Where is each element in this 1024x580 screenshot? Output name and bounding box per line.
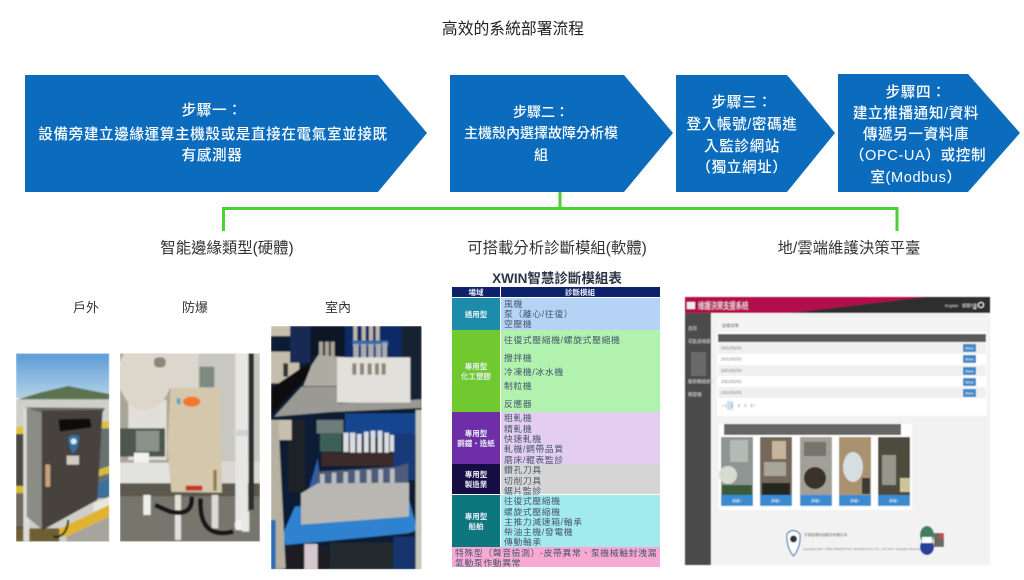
dashboard table: More (965, 392, 974, 396)
row group: chemical: 制粒機 (504, 380, 532, 391)
step 2 arrow: 步驟二： (513, 104, 569, 120)
table header: 場域 (468, 287, 484, 297)
row group: ship (452, 495, 660, 547)
row group: chemical: 專用型 (465, 361, 488, 371)
dashboard equipment cards: 詳細 › (811, 498, 821, 503)
photo: outdoor cabinet (16, 353, 109, 543)
row group: general: 風機 (504, 298, 523, 309)
step 3 arrow: 步驟三： (712, 94, 772, 111)
step 3 arrow: （獨立網址） (696, 158, 788, 176)
row group: steel and paper: 磨床/輥表監診 (504, 454, 564, 465)
row group: chemical: 反應器 (504, 398, 532, 409)
table title: XWIN智慧診斷模組表 (492, 270, 622, 286)
dashboard table: More (965, 358, 974, 362)
step 4 arrow: 室(Modbus） (870, 168, 962, 186)
step 4 arrow (838, 74, 1020, 192)
dashboard header: English 簡體中文 (945, 302, 978, 308)
row group: steel and paper: 專用型 (465, 428, 488, 438)
rack strips (271, 420, 286, 569)
dashboard sidebar: 廠房機組狀態 (688, 378, 715, 385)
upper left equipment (271, 326, 291, 336)
row: special (452, 547, 660, 568)
table header (452, 287, 660, 297)
step 2 arrow: 組 (534, 147, 548, 163)
label: outdoor: 戶外 (73, 300, 99, 315)
dashboard table: 2021/01/01 (721, 368, 743, 373)
row group: chemical: 往復式壓縮機/螺旋式壓縮機 (504, 334, 620, 345)
dashboard footer logos and copyright (787, 526, 944, 556)
row group: ship: 專用型 (465, 511, 488, 521)
row group: general (452, 298, 660, 330)
dashboard equipment cards: 詳細 › (889, 498, 899, 503)
dashboard table: 2021/01/01 (721, 379, 743, 384)
row group: chemical (452, 330, 660, 412)
step 2 arrow (450, 75, 673, 192)
row group: manufacturing: 製造業 (465, 479, 488, 489)
row group: chemical: 冷凍機/冰水機 (504, 366, 564, 377)
label: indoor: 室內 (325, 300, 351, 315)
row group: steel and paper: 粗軋機 (504, 412, 532, 423)
row group: ship: 主推力減速箱/軸承 (504, 516, 583, 527)
photo: indoor cabinet (271, 326, 422, 569)
dashboard header: ⤓ (973, 302, 977, 311)
upper terminals (353, 326, 357, 341)
dashboard table: More (965, 370, 974, 374)
step 1 arrow: 步驟一： (182, 102, 242, 119)
row group: chemical: 攪拌機 (504, 352, 532, 363)
step 1 arrow: 有感測器 (182, 146, 242, 164)
software module table (452, 270, 660, 568)
step 4 arrow: 建立推播通知/資料 (853, 104, 979, 122)
row group: steel and paper: 精軋機 (504, 423, 532, 434)
row group: steel and paper: 鋼鐵、造紙 (457, 438, 495, 448)
step 4 arrow: 傳遞另一資料庫 (863, 125, 969, 143)
row group: manufacturing (452, 464, 660, 496)
dashboard footer logos and copyright: Copyright 2017. XWIN PREDICTIVE TECHNOLOGY CO., LTD 2017. All Rights Reserved. (803, 547, 923, 551)
dashboard table: ‹ 1 2 3 4 5 › (722, 403, 756, 408)
dashboard equipment cards: 詳細 › (850, 498, 860, 503)
row group: steel and paper (452, 412, 660, 465)
dashboard screenshot (685, 297, 990, 565)
title: 高效的系統部署流程 (442, 20, 584, 38)
blue tray (282, 500, 418, 545)
row group: general: 泵（離心/往復） (504, 308, 573, 319)
lower wiring (345, 413, 417, 437)
row group: manufacturing: 專用型 (465, 469, 488, 479)
step 1 arrow (25, 75, 427, 192)
lower block (308, 458, 320, 488)
row group: steel and paper: 軋機/鋼帶品質 (504, 443, 564, 454)
photo: explosion-proof box (118, 340, 260, 542)
row group: ship: 傳動軸承 (504, 536, 542, 547)
row group: steel and paper: 快速軋機 (504, 433, 542, 444)
row group: manufacturing: 鋸片監診 (504, 485, 542, 496)
dashboard table: 2021/01/01 (721, 346, 743, 350)
dashboard equipment cards (719, 424, 912, 510)
green connector bracket (224, 192, 897, 231)
dashboard table: 2021/01/01 (721, 356, 743, 362)
table header: 診斷模組 (565, 287, 595, 297)
step 1 arrow: 設備旁建立邊緣運算主機殼或是直接在電氣室並接既 (38, 125, 388, 143)
dashboard header: 維護決策支援系統 (698, 300, 748, 311)
dashboard sidebar: 首頁 (688, 325, 697, 332)
dashboard sidebar: 可監測項目 (688, 338, 710, 345)
row group: ship: 螺旋式壓縮機 (504, 506, 561, 517)
dashboard equipment cards: 詳細 › (771, 498, 781, 503)
step 3 arrow: 入監診網站 (704, 138, 780, 155)
dashboard footer logos and copyright: 宇辰智慧科技股份有限公司 (804, 532, 848, 537)
dashboard table (717, 318, 987, 416)
bottom (285, 547, 328, 569)
dashboard sidebar: 精密儀 (688, 391, 702, 398)
row group: manufacturing: 鑽孔刀具 (504, 464, 542, 475)
dashboard table: 設備清單 (722, 322, 739, 329)
upper shelf blocks (303, 355, 347, 386)
dashboard table: 2021/01/01 (721, 390, 743, 395)
heading: software: 可搭載分析診斷模組(軟體) (467, 239, 647, 257)
row group: general: 空壓機 (504, 318, 532, 329)
row group: ship: 船舶 (468, 521, 484, 531)
heading: platform: 地/雲端維護決策平臺 (778, 238, 920, 257)
dashboard equipment cards: 詳細 › (732, 498, 742, 503)
dashboard header (685, 297, 990, 313)
step 2 arrow: 主機殼內選擇故障分析模 (464, 125, 618, 141)
heading: hardware: 智能邊緣類型(硬體) (160, 239, 294, 257)
row: special: 氣動泵作動異常 (455, 557, 521, 568)
row group: ship: 往復式壓縮機 (504, 495, 561, 506)
row group: manufacturing: 切削刀具 (504, 475, 542, 486)
step 3 arrow (676, 75, 835, 192)
step 4 arrow: 步驟四： (886, 84, 946, 101)
step 3 arrow: 登入帳號/密碼進 (686, 115, 798, 133)
step 4 arrow: （OPC-UA）或控制 (850, 147, 986, 164)
dashboard sidebar (685, 313, 715, 565)
dashboard table: More (965, 380, 974, 384)
row group: chemical: 化工塑膠 (461, 371, 491, 381)
row group: general: 通用型 (465, 309, 488, 319)
dashboard table: More (965, 346, 974, 350)
row group: ship: 柴油主機/發電機 (504, 526, 573, 537)
row: special: 特殊型（聲音檢測）-皮帶異常、泵機械軸封洩漏 (455, 547, 657, 558)
label: explosion-proof: 防爆 (182, 300, 208, 315)
